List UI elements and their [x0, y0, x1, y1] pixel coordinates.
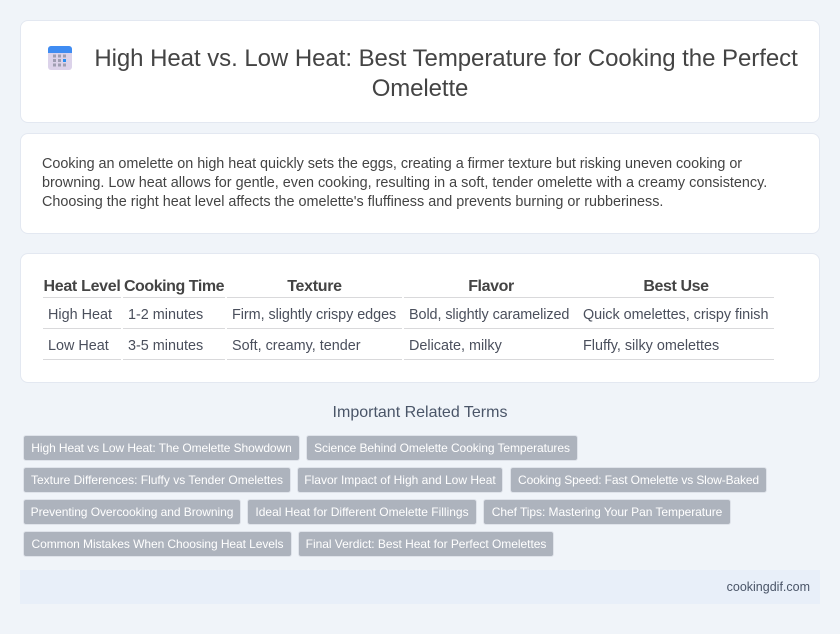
table header [43, 278, 709, 295]
footer source: cookingdif.com [727, 580, 810, 594]
footer bar [20, 570, 820, 604]
tag: Preventing Overcooking and Browning [31, 505, 233, 519]
tag [23, 467, 291, 493]
table row: low heat: Soft, creamy, tender [232, 338, 361, 354]
tag [306, 435, 578, 461]
panel: description text: Cooking an omelette on high heat quickly sets the eggs, creating a firmer texture but risking uneven cooking or [42, 156, 742, 172]
table header: Texture [287, 278, 342, 295]
tag: Texture Differences: Fluffy vs Tender Omelettes [31, 473, 283, 487]
table row: high heat [48, 307, 768, 323]
table header: Best Use [643, 278, 709, 295]
table row: high heat: Firm, slightly crispy edges [232, 307, 396, 323]
table header: Flavor [468, 278, 514, 295]
table row: low heat: Fluffy, silky omelettes [583, 338, 719, 354]
tag [247, 499, 477, 525]
tag: Science Behind Omelette Cooking Temperatures [314, 441, 570, 455]
icon: calendar [48, 46, 72, 70]
table row: low heat [48, 338, 719, 354]
panel: description text [20, 133, 820, 234]
title [94, 45, 798, 102]
panel: description text: Choosing the right heat level affects the omelette's fluffiness and prevents burning or rubberiness. [42, 194, 663, 210]
tag [23, 499, 241, 525]
table row: high heat: Quick omelettes, crispy finish [583, 307, 768, 323]
title: Omelette [372, 75, 468, 102]
table row: high heat: Bold, slightly caramelized [409, 307, 569, 323]
tag [298, 531, 554, 557]
table header: Heat Level [43, 278, 121, 295]
tag: Ideal Heat for Different Omelette Fillings [255, 505, 469, 519]
tag: Common Mistakes When Choosing Heat Levels [32, 537, 283, 551]
table header: Cooking Time [124, 278, 224, 295]
heading: related terms: Important Related Terms [333, 404, 507, 421]
table row: high heat: High Heat [48, 307, 112, 323]
panel: related term tags [23, 435, 767, 557]
title: High Heat vs. Low Heat: Best Temperature for Cooking the Perfect [94, 45, 798, 72]
tag [23, 435, 300, 461]
tag: Chef Tips: Mastering Your Pan Temperature [492, 505, 722, 519]
panel: comparison table [20, 253, 820, 383]
tag [510, 467, 767, 493]
tag [297, 467, 503, 493]
panel: description text: browning. Low heat allows for gentle, even cooking, resulting in a soft, tender omelette with a creamy consistency. [42, 175, 767, 191]
tag: Final Verdict: Best Heat for Perfect Omelettes [306, 537, 546, 551]
tag [23, 531, 292, 557]
table row: high heat: 1-2 minutes [128, 307, 203, 323]
table row: low heat: Low Heat [48, 338, 109, 354]
table row: low heat: 3-5 minutes [128, 338, 203, 354]
tag: Cooking Speed: Fast Omelette vs Slow-Baked [518, 473, 759, 487]
tag: Flavor Impact of High and Low Heat [304, 473, 496, 487]
table row: low heat: Delicate, milky [409, 338, 502, 354]
panel: title card [20, 20, 820, 123]
tag [483, 499, 731, 525]
tag: High Heat vs Low Heat: The Omelette Showdown [31, 441, 292, 455]
